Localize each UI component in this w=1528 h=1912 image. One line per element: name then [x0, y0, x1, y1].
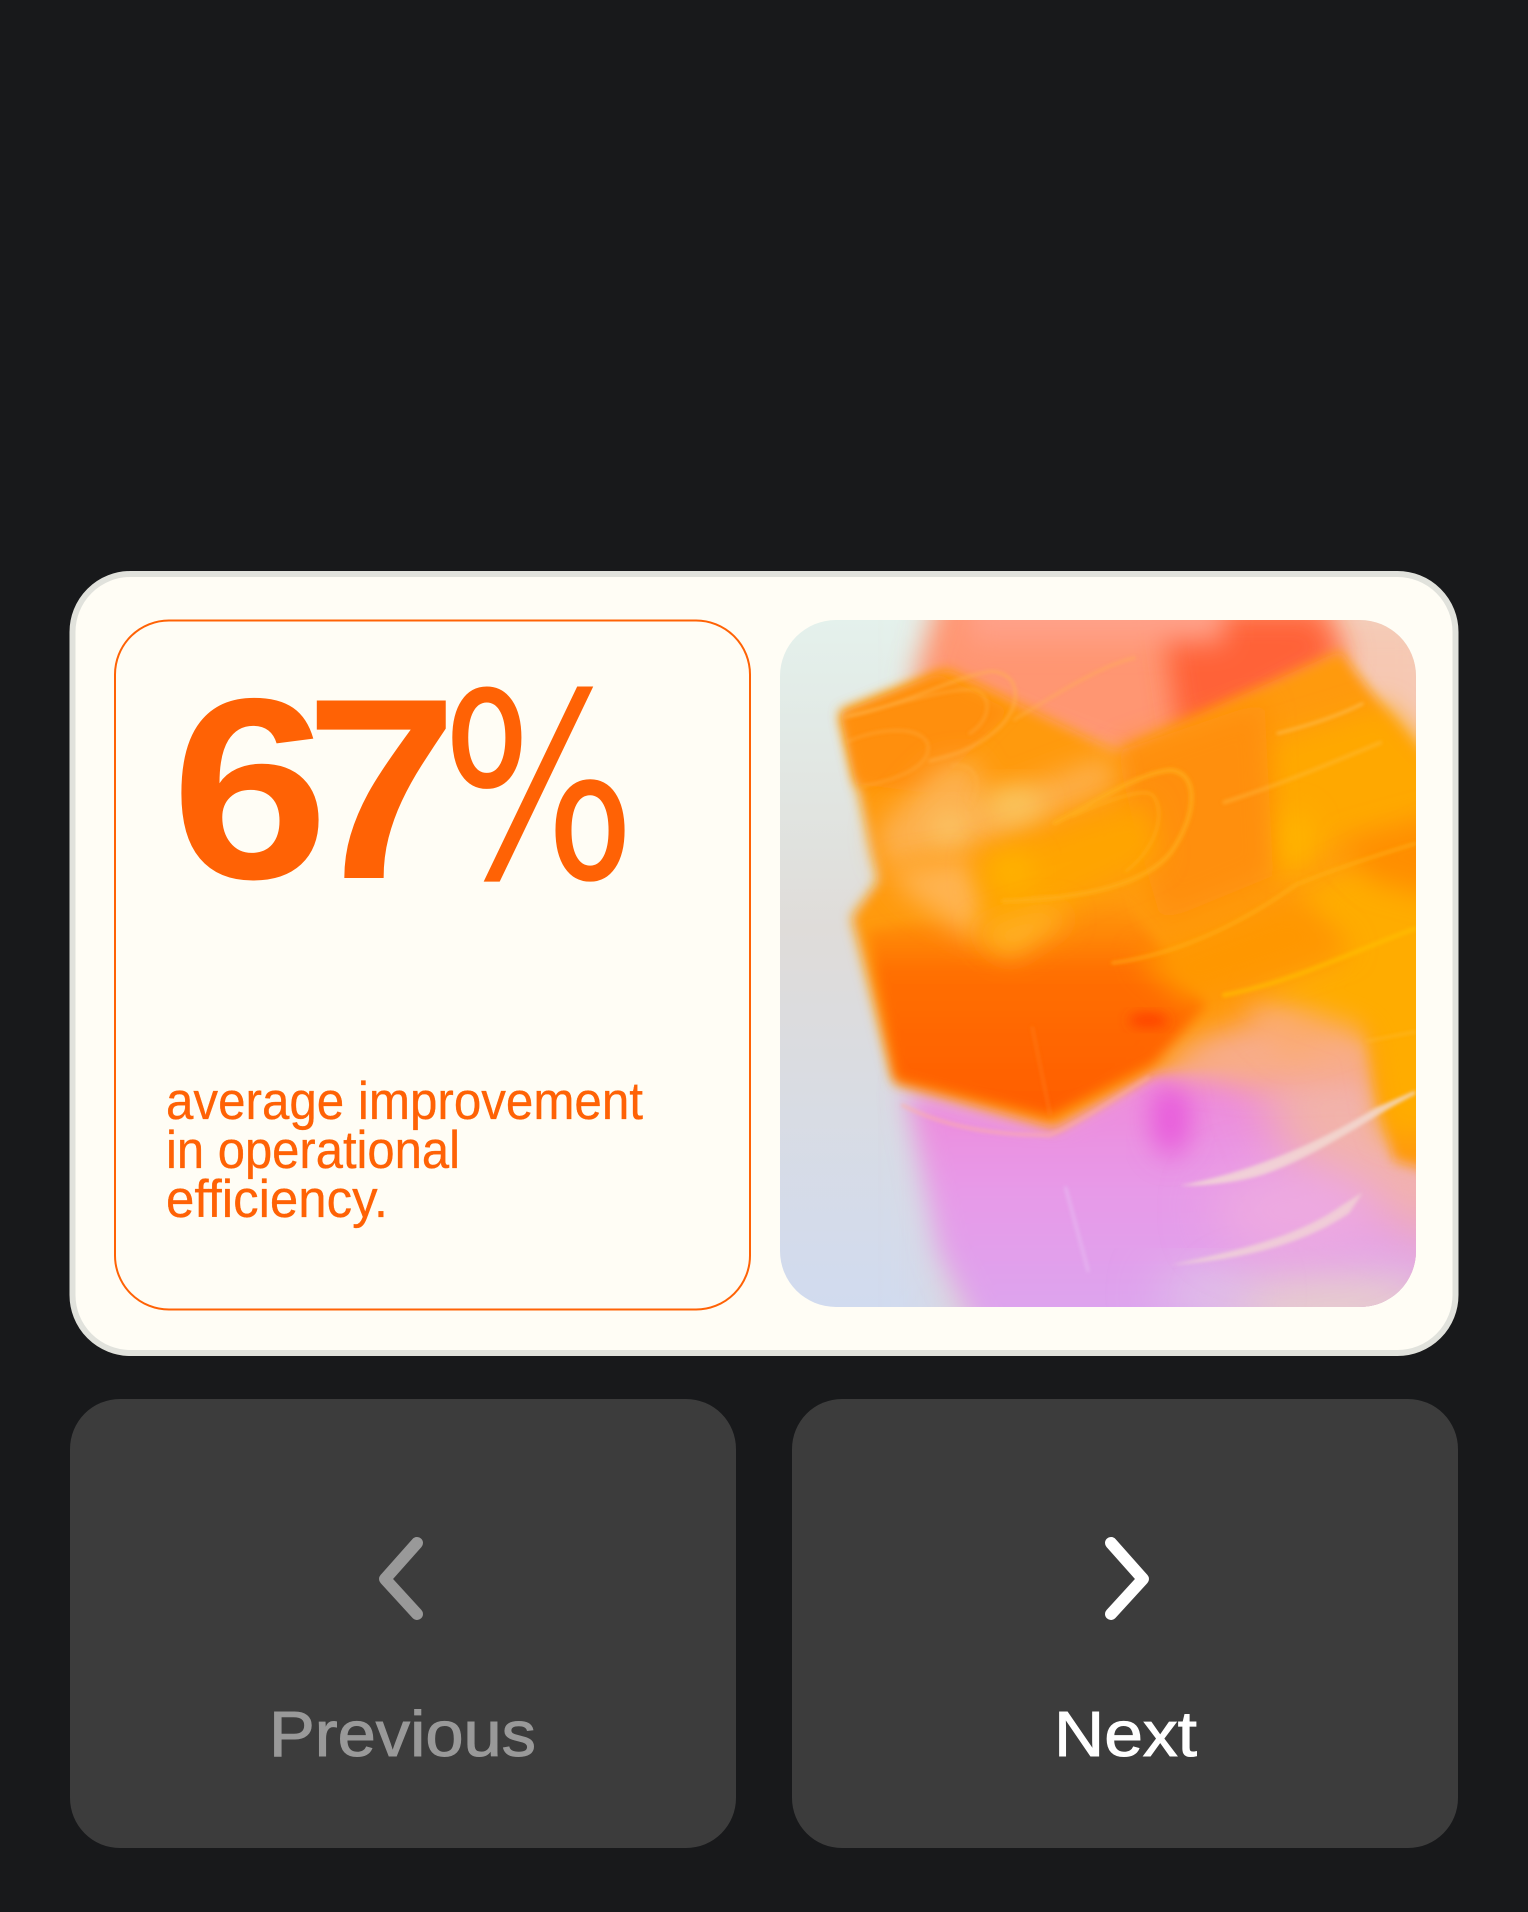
label: previous: Previous — [269, 1698, 536, 1770]
description text: in operational — [166, 1121, 460, 1180]
panel: statistic box — [115, 620, 750, 1310]
big number: 67%: 6 — [171, 645, 329, 933]
pale fading to the pink region — [1153, 990, 1371, 1087]
label: next: Next — [1054, 1698, 1197, 1770]
amber right panels — [1276, 688, 1416, 848]
lower pink and purple area — [894, 1067, 1416, 1307]
pale streaks in the pink area — [1171, 1091, 1415, 1265]
big number: 67%: 7 — [305, 646, 458, 933]
icon: left chevron — [385, 1543, 417, 1614]
icon: right chevron — [1111, 1543, 1143, 1614]
description text — [166, 1072, 643, 1229]
upper yellow highlights — [876, 756, 1117, 867]
big number: 67% — [171, 639, 636, 939]
light wisps and swirls — [845, 658, 1415, 1271]
deep orange lower band — [867, 894, 1206, 1117]
big number: 67%: % — [441, 639, 636, 939]
description text: efficiency. — [166, 1170, 388, 1229]
button: next — [792, 1399, 1458, 1848]
warm wash towards the right side — [932, 620, 1416, 1307]
button: previous — [70, 1399, 736, 1848]
main orange mass — [840, 651, 1456, 1179]
description text: average improvement — [166, 1072, 643, 1131]
coral top band — [898, 620, 1358, 754]
abstract blurred orange and pink image — [780, 620, 1416, 1307]
panel: stat card — [72, 573, 1492, 1362]
